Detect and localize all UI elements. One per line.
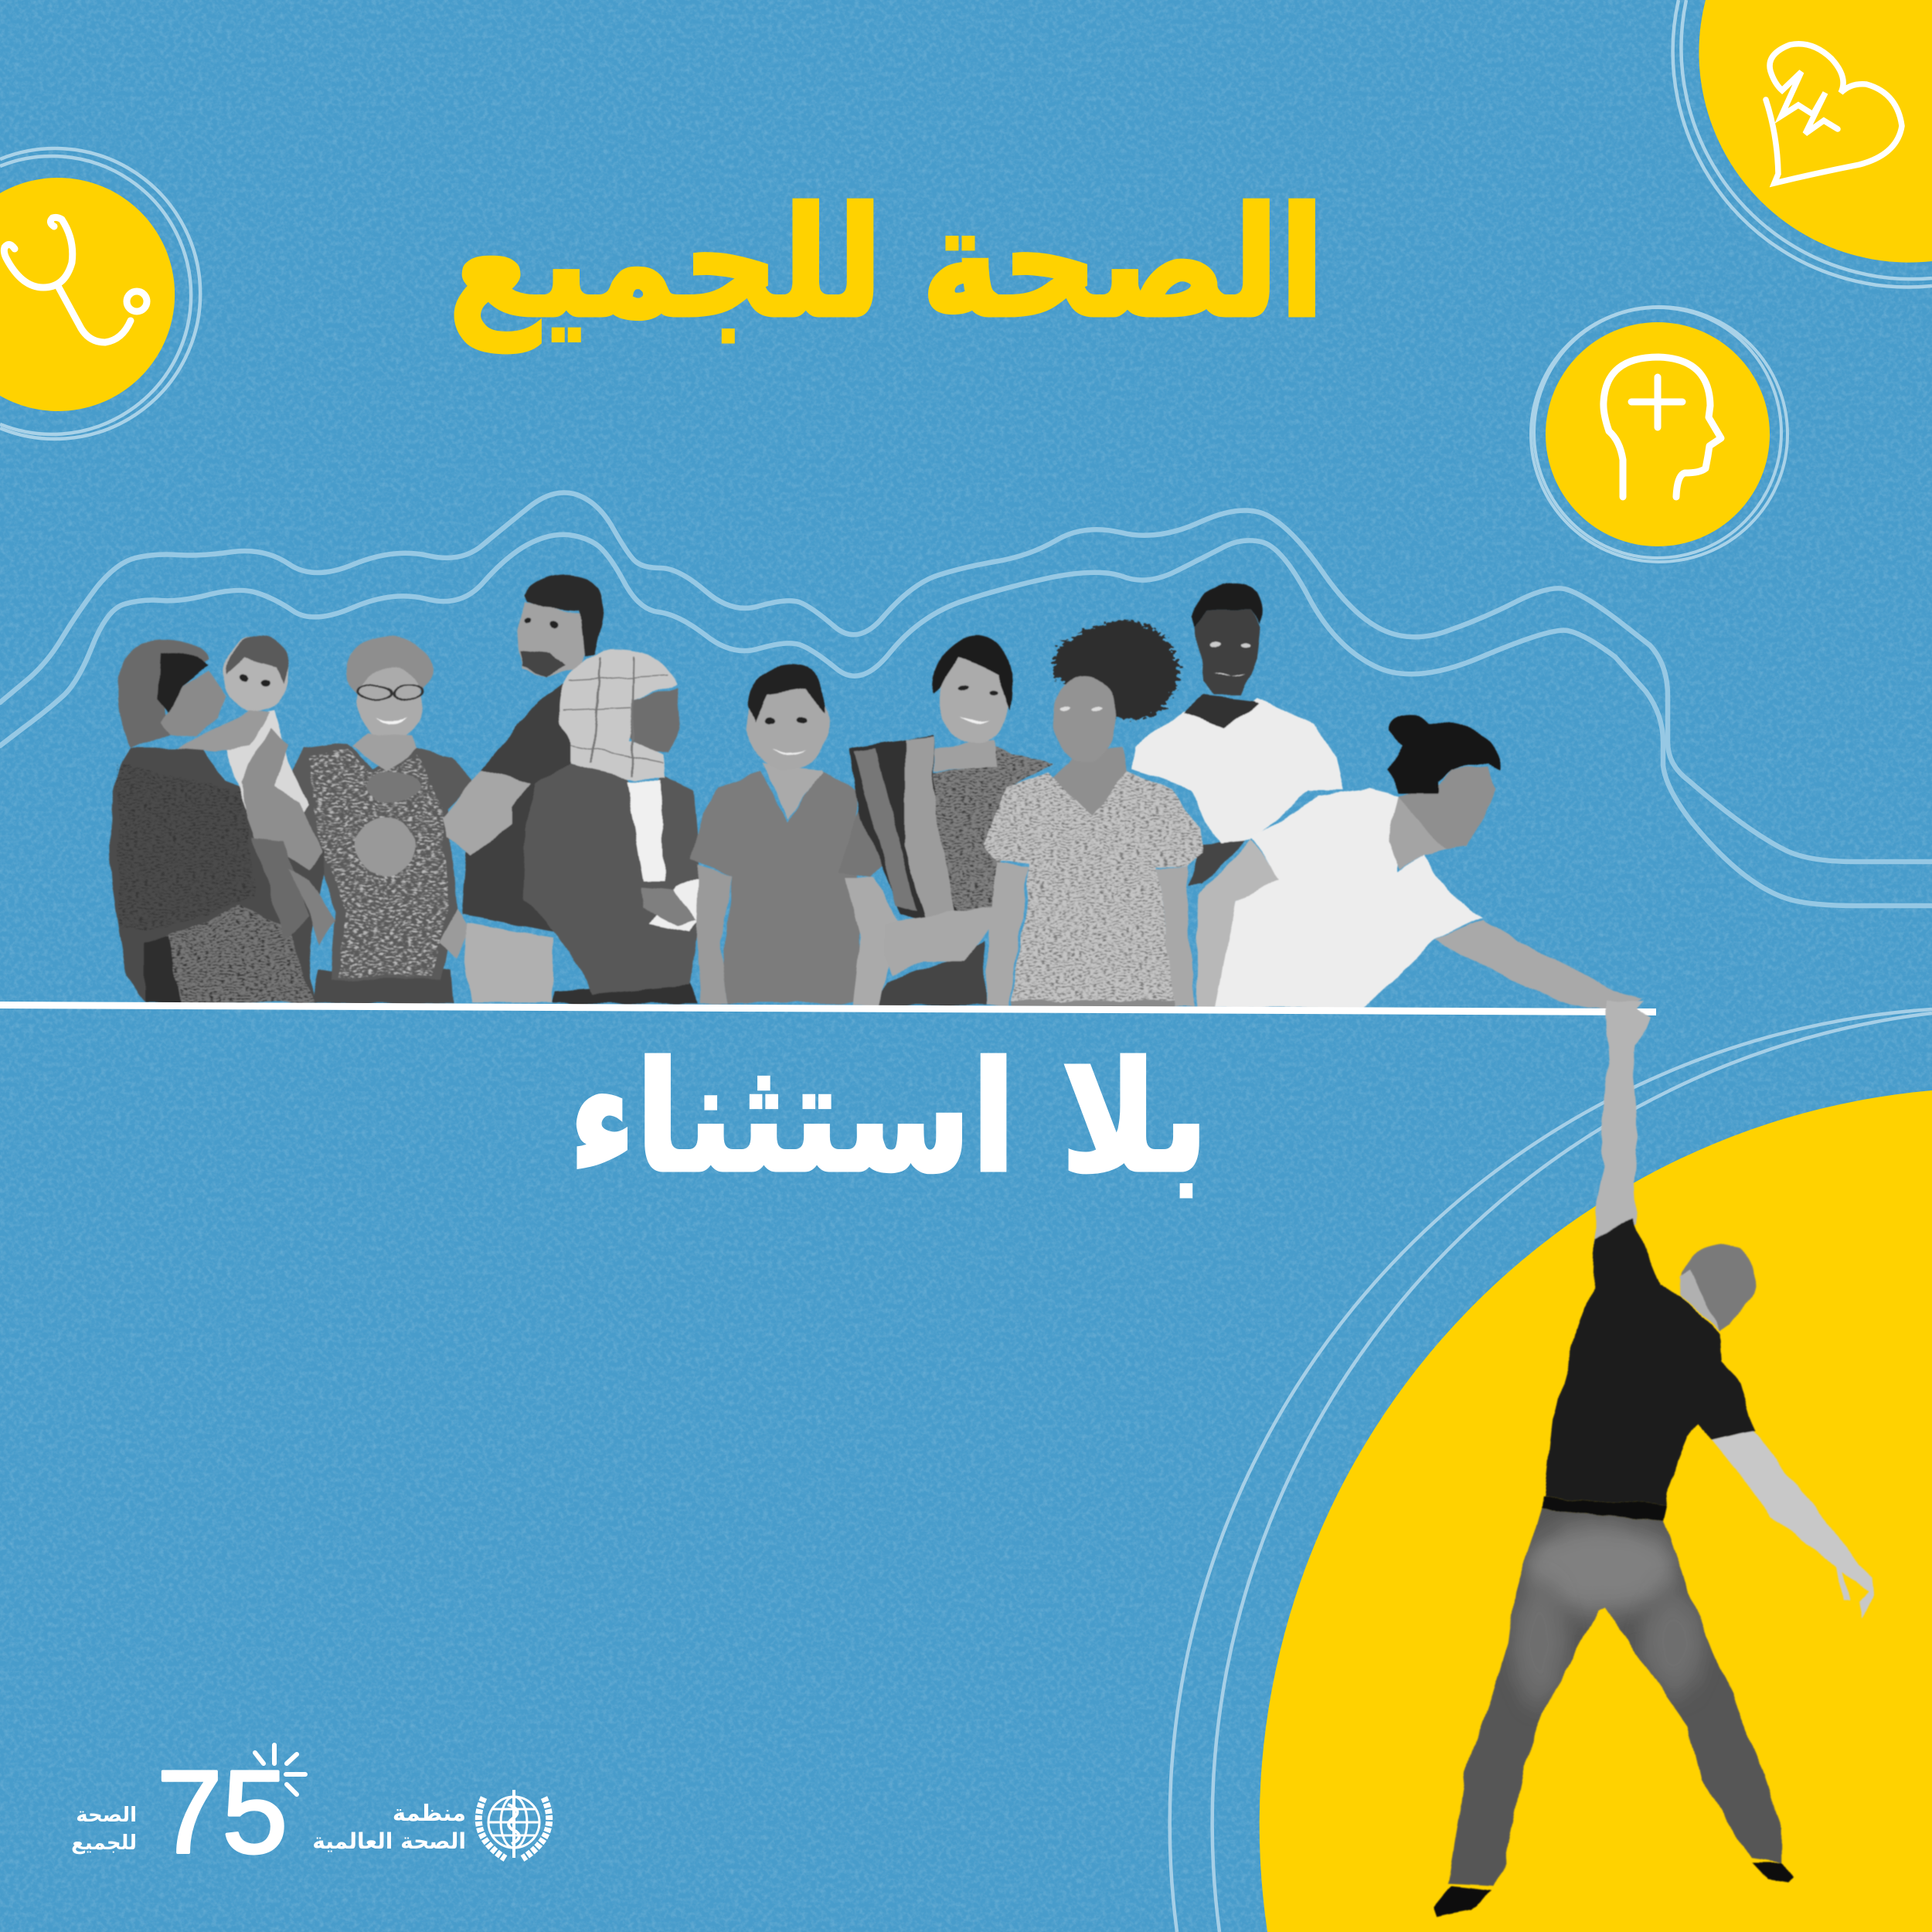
- person: older woman with glasses: [291, 635, 474, 1003]
- icon: head: [1604, 357, 1721, 497]
- head: [1681, 1245, 1755, 1332]
- person: woman with woven shawl: [838, 636, 1053, 1006]
- jeans: [1448, 1509, 1783, 1886]
- person: man in white t-shirt: [1132, 583, 1344, 886]
- title: الصحة للجميع: [448, 175, 1325, 353]
- ear and neck: [1680, 1268, 1719, 1332]
- belt: [1541, 1498, 1667, 1521]
- jeans highlights: [1512, 1523, 1705, 1703]
- person: woman with scarf and child: [110, 637, 336, 1003]
- shirt: [1545, 1219, 1755, 1505]
- label: organization name line 2: الصحة العالمية: [312, 1828, 466, 1854]
- icon: heart with pulse: [1766, 44, 1902, 183]
- person: man with hair bun leaning: [1196, 715, 1502, 1008]
- hanging man: [1434, 1001, 1872, 1917]
- large yellow circle: [1260, 1090, 1932, 1932]
- badge: head with plus: [1531, 307, 1787, 562]
- person: young woman with curly hair: [984, 621, 1203, 1008]
- label: organization name line 1: منظمة: [393, 1800, 466, 1826]
- left people, zoom-space: [110, 575, 861, 1003]
- icon: stethoscope: [4, 217, 147, 342]
- ledge line: [0, 1002, 1656, 1015]
- label: health: الصحة: [76, 1804, 137, 1827]
- badge: stethoscope: [0, 148, 200, 439]
- sun rays: [255, 1745, 305, 1794]
- rings around large yellow circle: [1170, 1009, 1932, 1932]
- badge: broken heart: [1673, 0, 1932, 287]
- hanging arm: [1594, 1001, 1650, 1244]
- people group: [110, 575, 1642, 1012]
- leaning man's reaching arm: [1435, 920, 1642, 1012]
- lowered arm: [1710, 1430, 1872, 1619]
- label: for all: للجميع: [71, 1832, 137, 1855]
- person: boy in polo shirt: [691, 665, 861, 1003]
- icon: WHO emblem: [478, 1790, 549, 1859]
- person: man with arms crossed: [442, 575, 604, 1003]
- number 75: 75: [157, 1747, 287, 1878]
- person: girl with plaid headscarf: [523, 649, 706, 1003]
- right people, zoom-space: [838, 583, 1502, 1008]
- subtitle: بلا استثناء: [569, 1030, 1209, 1206]
- wavy lines: [0, 493, 1932, 906]
- shoes: [1434, 1862, 1793, 1917]
- logo: WHO 75: [71, 1745, 549, 1878]
